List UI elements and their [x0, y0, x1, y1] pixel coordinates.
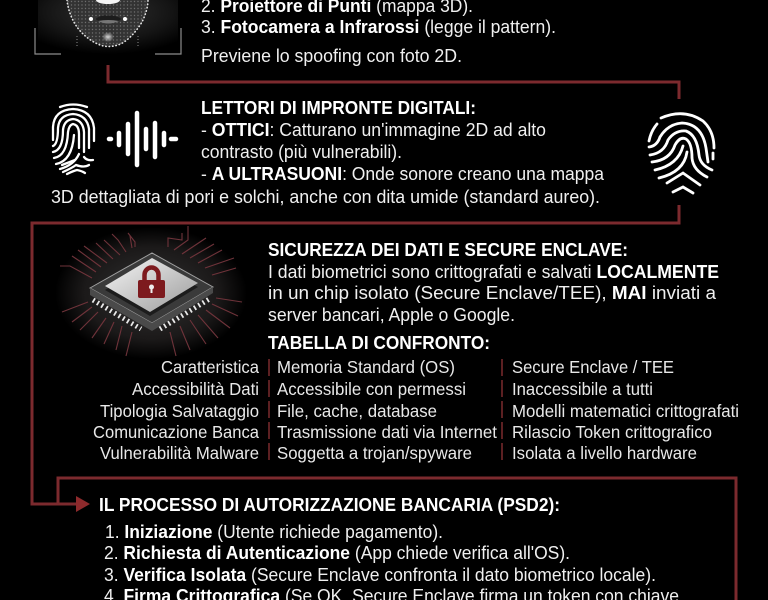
connector: face to fingerprint	[108, 65, 679, 99]
table: comparison: Accessibilità Dati	[132, 379, 259, 399]
icon: fingerprint small	[53, 104, 94, 174]
table: comparison	[93, 357, 739, 463]
text block: face id components: 3. Fotocamera a Infrarossi (legge il pattern).	[201, 17, 556, 37]
text block: data security: I dati biometrici sono crittografati e salvati LOCALMENTE	[268, 262, 719, 282]
text block: data security: in un chip isolato (Secure Enclave/TEE), MAI inviati a	[268, 283, 717, 303]
icon: secure chip with padlock	[55, 226, 247, 359]
table: comparison: Soggetta a trojan/spyware	[277, 443, 472, 463]
text block: face id components: Previene lo spoofing con foto 2D.	[201, 46, 462, 66]
text block: data security: server bancari, Apple o Google.	[268, 305, 515, 325]
connector: fingerprint to enclave to process	[32, 205, 679, 504]
table: comparison: File, cache, database	[277, 401, 437, 421]
list: authorization steps: 2. Richiesta di Autenticazione (App chiede verifica all'OS).	[104, 543, 570, 563]
table: comparison: Caratteristica	[161, 357, 259, 377]
icon: face scan mesh	[35, 0, 181, 60]
text block: fingerprint readers: 3D dettagliata di pori e solchi, anche con dita umide (standard aureo).	[51, 187, 600, 207]
table: comparison: Memoria Standard (OS)	[277, 357, 455, 377]
table: comparison: Inaccessibile a tutti	[512, 379, 653, 399]
table: comparison: Tipologia Salvataggio	[100, 401, 259, 421]
table: comparison: Isolata a livello hardware	[512, 443, 697, 463]
panel frame: authorization process	[58, 478, 736, 600]
heading: comparison table: TABELLA DI CONFRONTO:	[268, 333, 490, 353]
text block: data security	[268, 240, 719, 325]
heading: authorization process: IL PROCESSO DI AUTORIZZAZIONE BANCARIA (PSD2):	[99, 495, 560, 515]
table: comparison: Trasmissione dati via Internet	[277, 422, 497, 442]
table: comparison: Secure Enclave / TEE	[512, 357, 674, 377]
text block: data security: SICUREZZA DEI DATI E SECURE ENCLAVE:	[268, 240, 628, 260]
table: comparison: Rilascio Token crittografico	[512, 422, 712, 442]
table: comparison: Modelli matematici crittografati	[512, 401, 739, 421]
icon: fingerprint large	[649, 114, 714, 193]
text block: fingerprint readers	[51, 98, 605, 207]
text block: fingerprint readers: - OTTICI: Catturano un'immagine 2D ad alto	[201, 120, 546, 140]
table: comparison: Accessibile con permessi	[277, 379, 466, 399]
arrow: into process	[76, 496, 90, 512]
text block: fingerprint readers: - A ULTRASUONI: Onde sonore creano una mappa	[201, 164, 605, 184]
list: authorization steps	[104, 522, 679, 600]
icon: sound wave	[109, 113, 176, 165]
table: comparison: Vulnerabilità Malware	[100, 443, 259, 463]
icon: padlock	[138, 268, 165, 298]
text block: fingerprint readers: contrasto (più vulnerabili).	[201, 142, 402, 162]
text block: face id components	[201, 0, 556, 66]
text block: fingerprint readers: LETTORI DI IMPRONTE DIGITALI:	[201, 98, 476, 118]
list: authorization steps: 1. Iniziazione (Utente richiede pagamento).	[105, 522, 443, 542]
table: comparison: Comunicazione Banca	[93, 422, 259, 442]
list: authorization steps: 3. Verifica Isolata (Secure Enclave confronta il dato biometrico locale).	[104, 565, 656, 585]
